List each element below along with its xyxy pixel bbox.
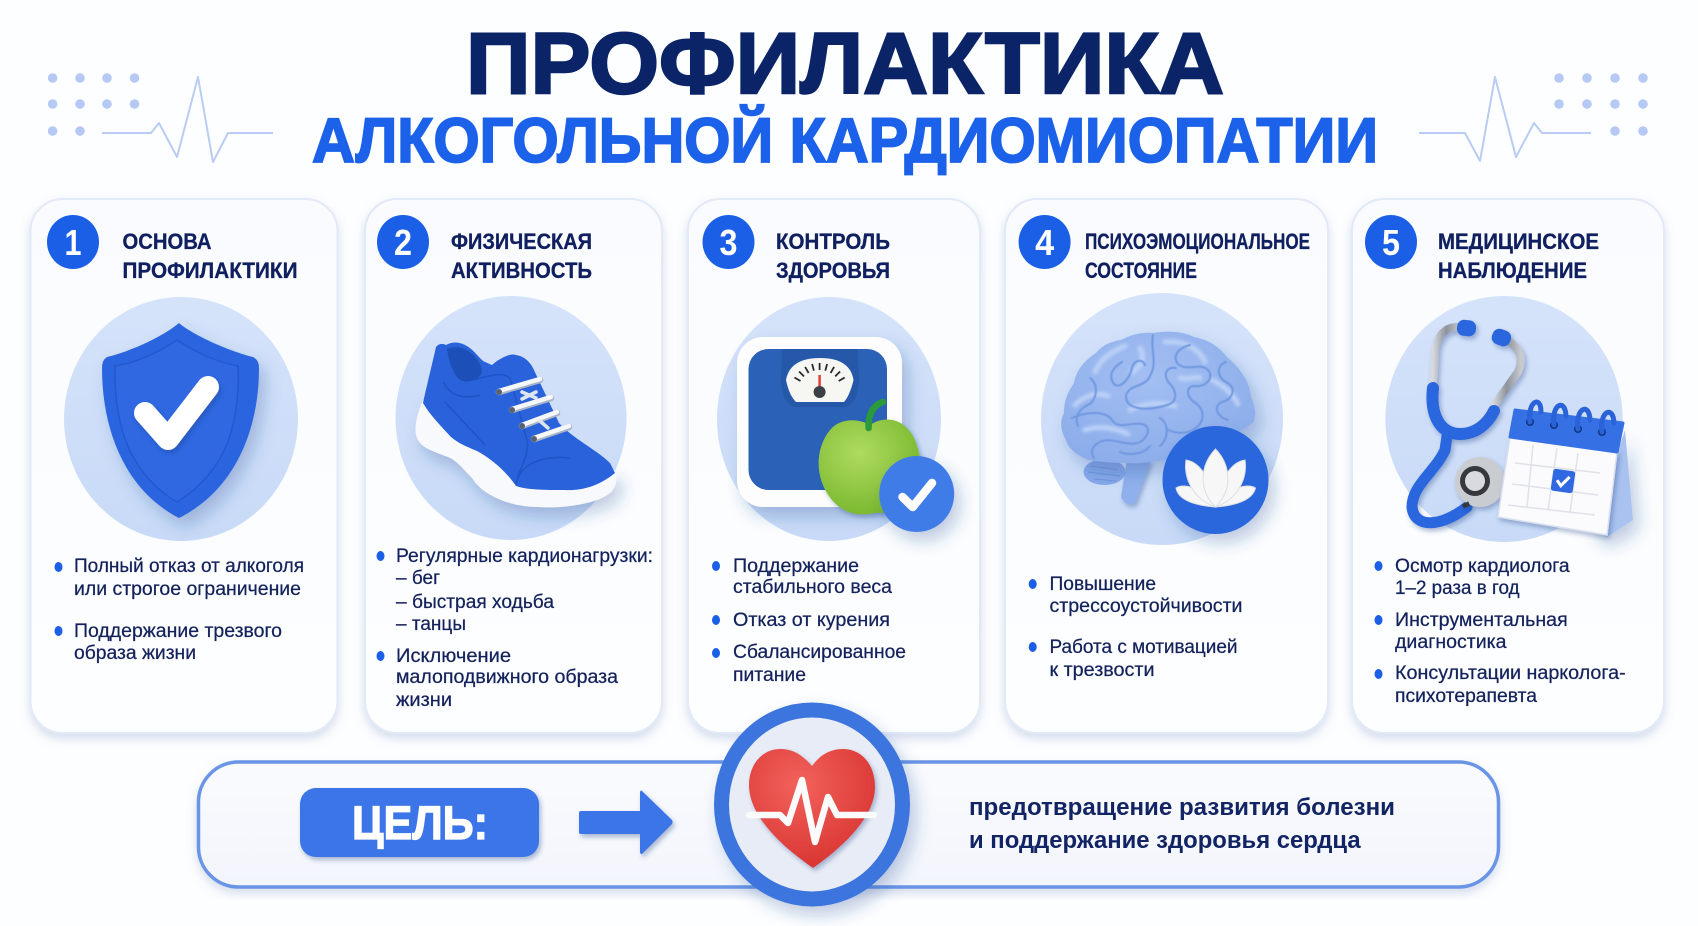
list 4 <box>1029 574 1242 681</box>
goal text: и поддержание здоровья сердца <box>969 827 1361 854</box>
list 1: образа жизни <box>74 643 196 664</box>
list 5 <box>1374 556 1626 707</box>
heading 4: ПСИХОЭМОЦИОНАЛЬНОЕ <box>1085 229 1310 254</box>
list 1: Полный отказ от алкоголя <box>74 556 304 577</box>
list 2: – бег <box>396 568 440 589</box>
icon: shield with check <box>64 297 298 541</box>
goal button <box>300 788 539 857</box>
panel: 1 основа профилактики <box>30 199 338 733</box>
heading 2 <box>451 229 592 283</box>
goal bar <box>198 710 1498 899</box>
badge 3: 3 <box>720 222 738 263</box>
badge 4 <box>1019 215 1071 269</box>
decoration: left dots and pulse line <box>48 73 273 162</box>
list 5: диагностика <box>1395 632 1507 653</box>
badge 3 <box>702 215 754 269</box>
card 2 background <box>365 199 662 733</box>
list 5: психотерапевта <box>1395 686 1537 707</box>
card 1 background <box>30 199 338 733</box>
list 3: питание <box>733 665 806 686</box>
list 3: Сбалансированное <box>733 642 906 663</box>
list 2: малоподвижного образа <box>396 667 618 688</box>
heading 3 <box>776 229 890 283</box>
icon: scale, apple and check <box>717 297 954 541</box>
badge 2: 2 <box>394 222 412 263</box>
list 1 <box>54 556 304 664</box>
list 2 <box>376 546 653 711</box>
heading 1: ПРОФИЛАКТИКИ <box>122 258 298 283</box>
badge 1: 1 <box>64 222 82 263</box>
heading 5: МЕДИЦИНСКОЕ <box>1438 229 1599 254</box>
heading 4: СОСТОЯНИЕ <box>1085 258 1197 283</box>
badge 5 <box>1365 215 1417 269</box>
panel: 3 контроль здоровья <box>688 199 980 733</box>
list 3: Отказ от курения <box>733 610 890 631</box>
panel: 4 психоэмоциональное состояние <box>1005 199 1328 733</box>
list 3 <box>712 556 906 686</box>
icon: heart with pulse <box>722 710 902 899</box>
badge 2 <box>377 215 429 269</box>
card 4 background <box>1005 199 1328 733</box>
icon: brain with lotus badge <box>1041 293 1283 545</box>
list 2: – танцы <box>396 614 466 635</box>
goal bar background <box>198 762 1498 887</box>
arrow <box>579 790 672 854</box>
heading 2: АКТИВНОСТЬ <box>451 258 592 283</box>
list 4: к трезвости <box>1050 660 1154 681</box>
list 5: Консультации нарколога- <box>1395 663 1626 684</box>
list 5: 1–2 раза в год <box>1395 578 1520 599</box>
panel: 5 медицинское наблюдение <box>1352 199 1664 733</box>
list 2: Исключение <box>396 646 511 667</box>
badge 1 <box>47 215 99 269</box>
heading 3: ЗДОРОВЬЯ <box>776 258 890 283</box>
card 5 background <box>1352 199 1664 733</box>
goal text: предотвращение развития болезни <box>969 794 1395 821</box>
list 1: или строгое ограничение <box>74 579 301 600</box>
card 3 background <box>688 199 980 733</box>
list 2: Регулярные кардионагрузки: <box>396 546 653 567</box>
list 4: Работа с мотивацией <box>1050 637 1238 658</box>
list 2: жизни <box>396 690 452 711</box>
badge 4: 4 <box>1035 222 1054 263</box>
title line 2: АЛКОГОЛЬНОЙ КАРДИОМИОПАТИИ <box>312 105 1378 176</box>
heading 5 <box>1438 229 1599 283</box>
goal button: ЦЕЛЬ: <box>352 796 488 849</box>
list 4: стрессоустойчивости <box>1050 596 1242 617</box>
heading 2: ФИЗИЧЕСКАЯ <box>451 229 592 254</box>
heading 5: НАБЛЮДЕНИЕ <box>1438 258 1587 283</box>
icon: stethoscope and calendar <box>1385 296 1633 542</box>
heading 1 <box>122 229 298 283</box>
list 2: – быстрая ходьба <box>396 592 554 613</box>
list 1: Поддержание трезвого <box>74 621 282 642</box>
title line 1: ПРОФИЛАКТИКА <box>466 16 1224 112</box>
goal text <box>969 794 1395 854</box>
list 4: Повышение <box>1050 574 1156 595</box>
list 5: Осмотр кардиолога <box>1395 556 1570 577</box>
panel: 2 физическая активность <box>365 199 662 733</box>
list 3: Поддержание <box>733 556 859 577</box>
icon: sneaker <box>396 296 626 540</box>
list 5: Инструментальная <box>1395 610 1568 631</box>
heading 4 <box>1085 229 1310 283</box>
heading 1: ОСНОВА <box>122 229 212 254</box>
badge 5: 5 <box>1382 222 1400 263</box>
decoration: right dots and pulse line <box>1419 73 1648 161</box>
list 3: стабильного веса <box>733 577 892 598</box>
heading 3: КОНТРОЛЬ <box>776 229 890 254</box>
